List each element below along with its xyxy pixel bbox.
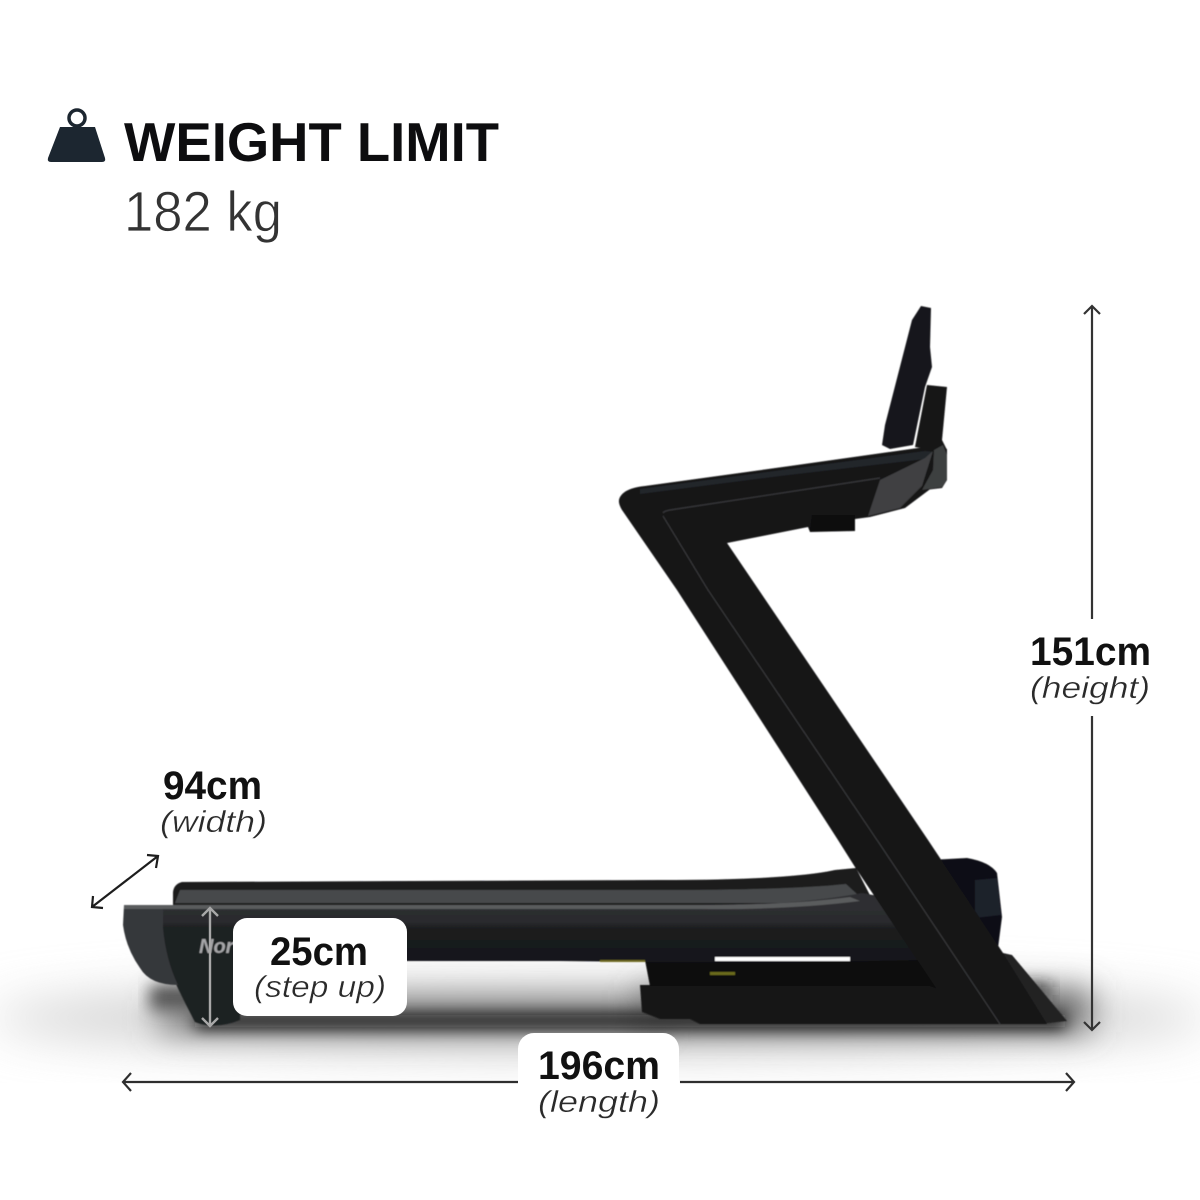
heading: weight limit: WEIGHT LIMIT	[124, 111, 499, 173]
deck top rail	[173, 868, 875, 905]
height value: 151cm	[1030, 630, 1151, 674]
rear foot	[160, 920, 240, 1026]
motor cover	[930, 858, 1004, 960]
running belt	[175, 884, 858, 903]
arm highlight	[640, 451, 934, 494]
length caption: (length)	[538, 1084, 660, 1119]
height dimension	[1030, 306, 1151, 1030]
weight limit heading block	[48, 110, 499, 244]
upright and console arm	[619, 447, 1047, 1024]
length dimension	[123, 1033, 1074, 1133]
deck side frame	[163, 893, 930, 962]
width arrow	[92, 855, 158, 908]
console mast	[915, 385, 947, 490]
lower frame	[640, 985, 1000, 1024]
width value: 94cm	[163, 764, 262, 808]
treadmill	[123, 306, 1067, 1026]
base plate	[960, 953, 1067, 1024]
floor shadow	[0, 984, 1200, 1052]
white slit	[715, 957, 850, 961]
icon: weight	[48, 110, 105, 162]
deck rim highlight	[124, 897, 860, 909]
width caption: (width)	[160, 804, 267, 839]
width dimension	[92, 764, 267, 908]
yellow detail	[600, 960, 645, 962]
display screen	[882, 306, 932, 449]
length arrow	[123, 1073, 1074, 1091]
logo on deck: Nor	[199, 936, 235, 958]
length value: 196cm	[538, 1044, 660, 1088]
length label box	[518, 1033, 679, 1133]
height arrow	[1084, 306, 1100, 1030]
grip under arm	[810, 515, 855, 531]
rear end cap	[123, 905, 240, 985]
step up caption: (step up)	[254, 969, 386, 1004]
step up value: 25cm	[270, 930, 368, 974]
weight value: 182 kg	[124, 180, 282, 244]
height caption: (height)	[1030, 670, 1150, 705]
arm groove	[663, 478, 1000, 1024]
step up arrow	[202, 908, 218, 1026]
step up label box	[233, 918, 407, 1016]
lift assembly	[645, 960, 970, 1000]
